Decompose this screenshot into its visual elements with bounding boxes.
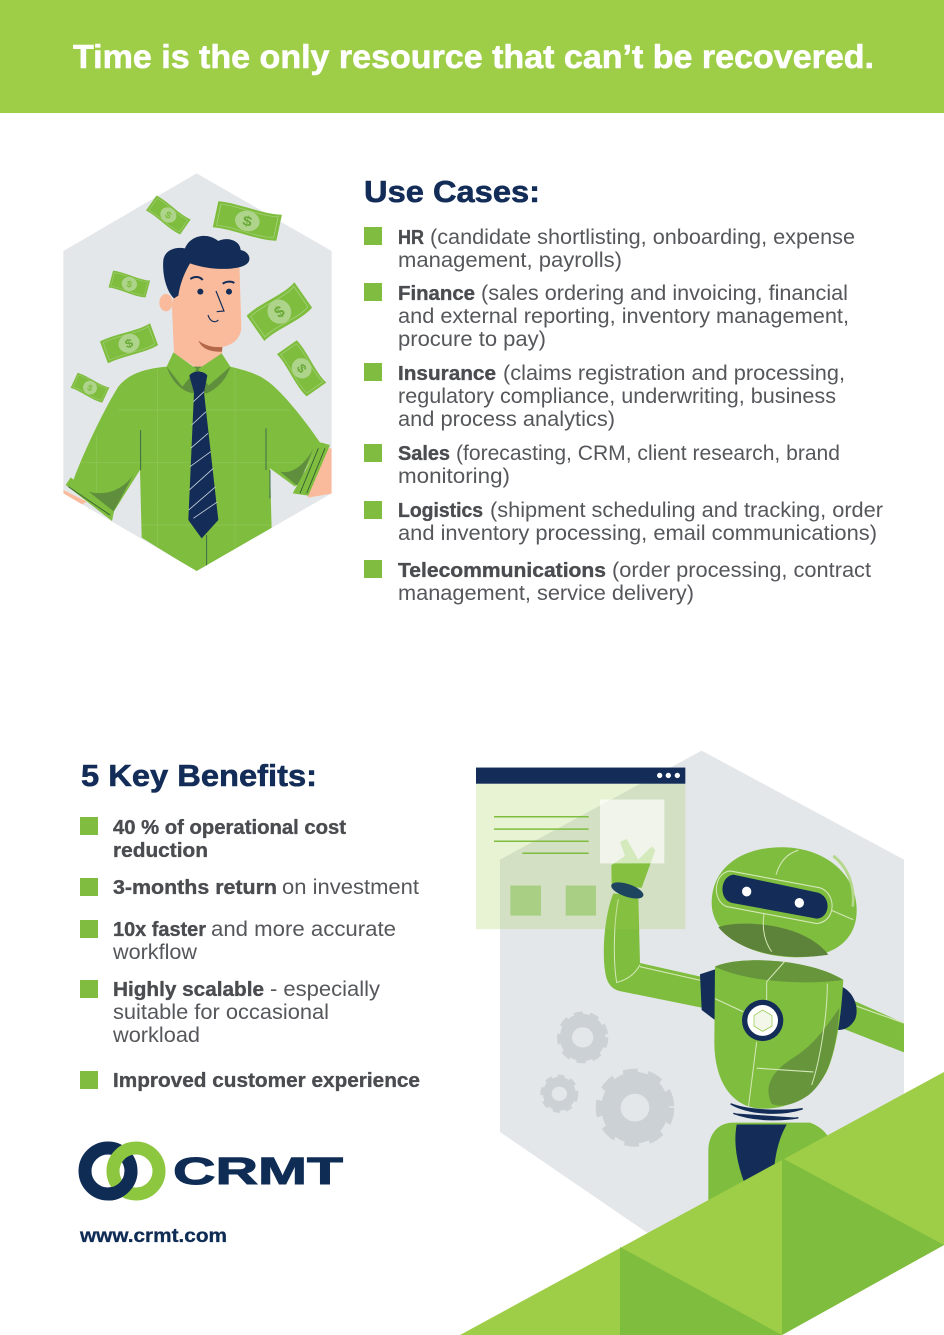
robot hips [708,1123,832,1234]
use case: sales: Sales [398,443,450,465]
benefit: faster workflow: 10x faster [113,919,206,941]
background hexagon [500,751,904,1271]
use case: insurance: Insurance [398,363,496,385]
heading: key benefits: 5 Key Benefits: [81,758,317,793]
website url: www.crmt.com [79,1226,227,1247]
floating window [476,768,685,929]
money bills: $ [86,382,94,393]
money bills: $ [123,335,136,351]
robot waist springs [731,1104,803,1120]
use case: insurance [364,362,845,431]
money bills [70,195,327,403]
use case: finance: and external reporting, inventory management, [398,305,849,328]
use case: sales [364,442,840,488]
chest core [742,1000,783,1041]
money bills: $ [294,361,310,376]
use case: finance: (sales ordering and invoicing, financial [481,282,848,305]
use case: sales: monitoring) [398,465,510,488]
decorative green triangles [460,1072,944,1335]
use case: HR: HR [398,227,424,249]
illustration: robot touching a screen [476,751,904,1271]
benefit: customer experience: Improved customer experience [113,1070,420,1092]
use case: HR: (candidate shortlisting, onboarding, expense [430,226,855,249]
heading: use cases: Use Cases: [364,174,540,209]
benefit: scalable: suitable for occasional [113,1001,329,1024]
use case: telecommunications: Telecommunications [398,560,606,582]
benefit: scalable: Highly scalable [113,979,264,1001]
illustration: businessman with flying money [63,173,333,572]
benefit: return on investment [80,876,419,899]
use case: logistics: and inventory processing, email communications) [398,522,877,545]
use case: finance: Finance [398,283,475,305]
use case: telecommunications [364,559,871,605]
money bills: $ [271,303,289,322]
benefit: return on investment: on investment [282,876,419,899]
use case: telecommunications: management, service delivery) [398,582,694,605]
use case: sales: (forecasting, CRM, client research, brand [456,442,840,465]
title: Time is the only resource that can’t be recovered. [73,38,874,75]
benefit: faster workflow: and more accurate [211,918,396,941]
benefit: scalable: workload [112,1024,200,1047]
logo: CRMT [85,1148,343,1194]
benefit: faster workflow: workflow [112,941,198,964]
money bills: $ [241,213,254,230]
use case: insurance: and process analytics) [398,408,615,431]
money bills: $ [162,210,173,222]
benefit: cost reduction: 40 % of operational cost [113,817,346,839]
robot head [712,847,857,957]
use case: logistics: (shipment scheduling and tracking, order [490,499,883,522]
benefit: scalable: - especially [270,978,381,1001]
benefit: cost reduction: reduction [113,840,208,862]
use case: HR: management, payrolls) [398,249,622,272]
use case: logistics [364,499,883,545]
use case: HR [364,226,855,272]
gears [543,1015,670,1142]
header banner [0,0,944,113]
use case: insurance: regulatory compliance, underwriting, business [398,385,836,408]
robot torso [714,960,843,1109]
use case: finance [364,282,849,351]
use case: logistics: Logistics [398,500,483,522]
shirt collar [167,367,230,393]
necktie [188,372,218,538]
benefit: faster workflow [80,918,396,964]
benefit: scalable [80,978,381,1047]
use case: telecommunications: (order processing, contract [612,559,871,582]
benefit: cost reduction [80,817,346,862]
robot shoulders and right arm [700,969,715,1020]
wristband [610,879,645,902]
logo: CRMT: CRMT [173,1151,343,1193]
use case: insurance: (claims registration and processing, [503,362,845,385]
benefit: return on investment: 3-months return [113,877,277,899]
use case: finance: procure to pay) [398,328,546,351]
robot arm left [604,893,715,1010]
money bills: $ [125,279,134,291]
